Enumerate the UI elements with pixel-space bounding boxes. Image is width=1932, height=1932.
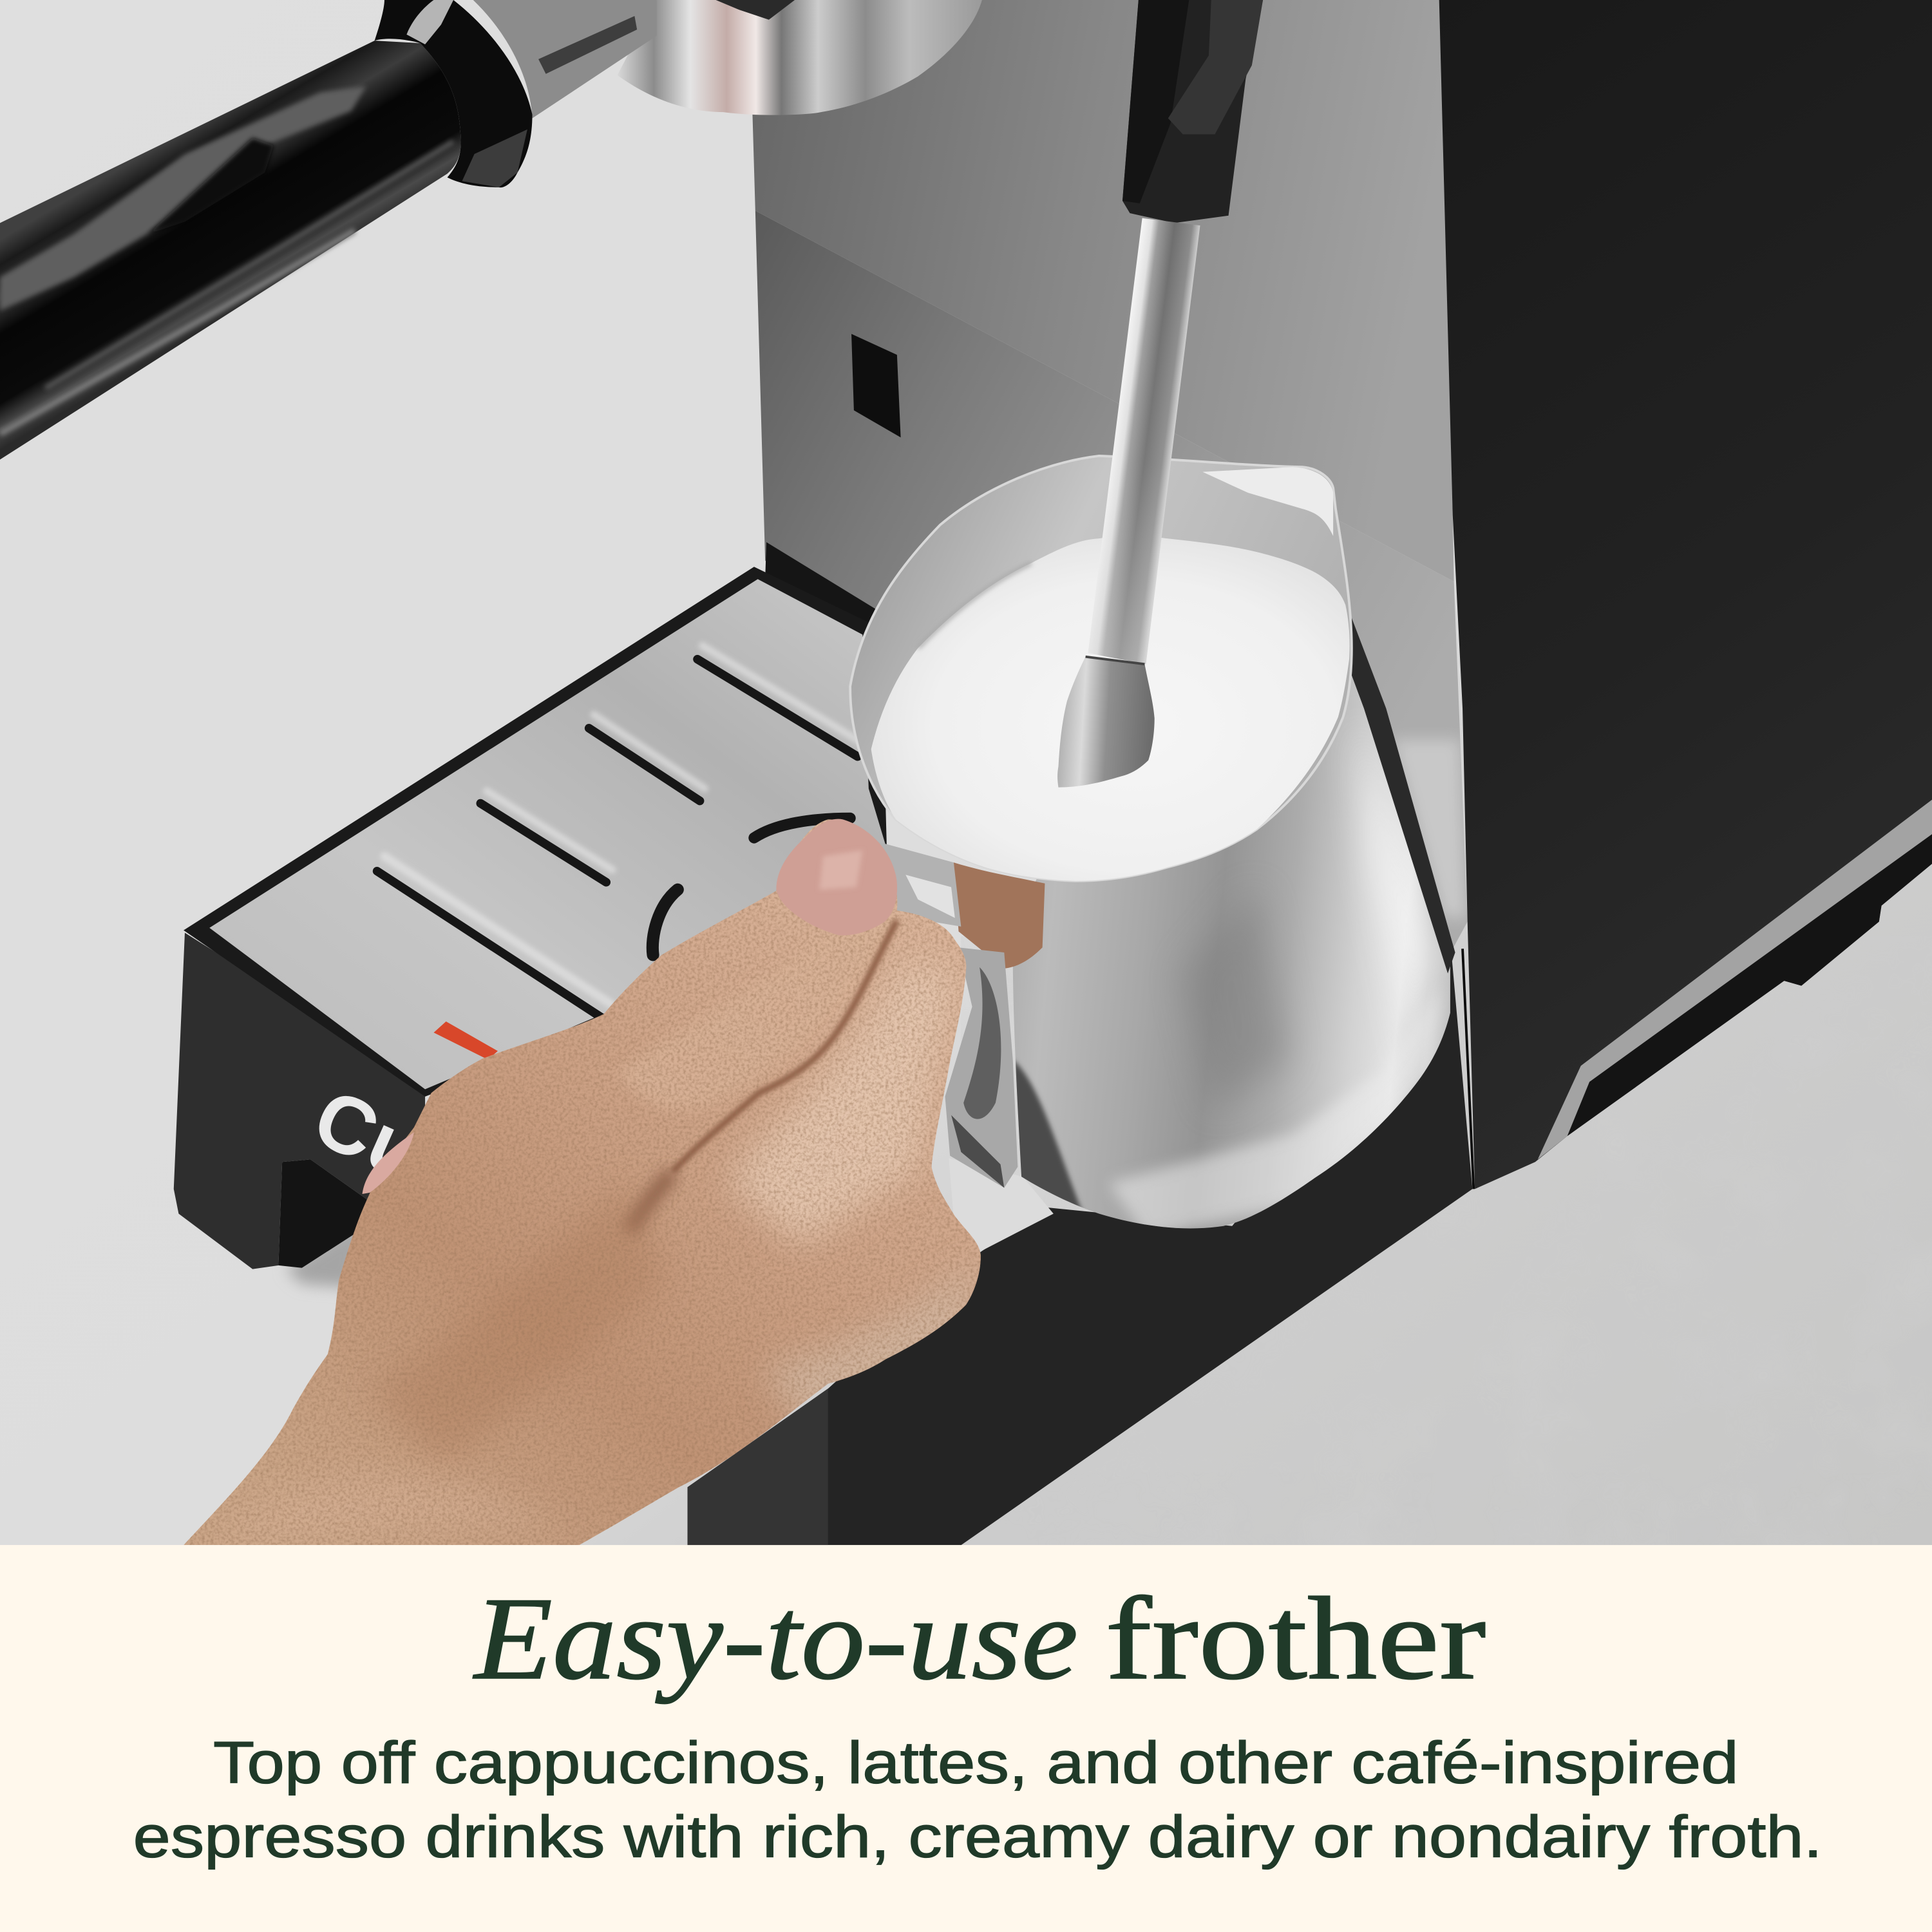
drip tray front [174,933,425,1269]
floor mottling [961,936,1932,1545]
finger nail small [362,1132,414,1194]
machine base [688,954,1472,1545]
handle collar [375,0,533,187]
pitcher rim interior [850,456,1352,881]
base side face [688,1388,828,1545]
knob tab [1168,0,1263,135]
drip tray steel top [209,579,887,1089]
portafilter handle [0,41,461,460]
handle glare dark blob [148,138,274,234]
handle edge highlight [0,231,355,433]
pitcher dark reflection band [1347,605,1455,973]
title: Easy-to-use [472,1573,1078,1704]
collar lower reflection [462,129,527,187]
knob shade [1122,0,1189,204]
handle glare [0,86,366,310]
drip tray rim [184,567,887,1097]
machine dark body [1439,0,1932,1189]
tray logo: Cu [301,1072,437,1198]
body under-trim shadow [1567,834,1932,1136]
panel slot [851,334,901,437]
body trim [1538,800,1932,1159]
body text: espresso drinks with rich, creamy dairy or nondairy froth. [133,1804,1823,1870]
photo: floor background [0,0,1932,1545]
froth bubble edge [918,563,1031,648]
title: frother [1105,1573,1486,1704]
tray steel lower right [949,1158,1054,1252]
floor shadow [283,1235,353,1294]
neck slot [538,16,637,74]
froth surface [871,536,1350,881]
steam wand [1057,218,1200,788]
nail highlight [819,850,862,889]
shadow under panel [765,542,876,622]
body text: Top off cappuccinos, lattes, and other café-inspired [213,1730,1739,1795]
pitcher reflections [1010,715,1442,1238]
base and body seam [1463,949,1473,1189]
steam knob [1122,0,1263,223]
caption panel [0,1545,1932,1932]
handle lower highlight [46,142,453,388]
portafilter basket [618,0,982,115]
machine front panel lower [755,211,1468,951]
finger behind pitcher [954,862,1045,969]
hand [173,813,998,1553]
panel bright glow near base [1392,739,1466,918]
body text [133,1730,1823,1870]
tray slots [377,646,860,1019]
collar chrome [406,0,453,44]
tray notch [278,1159,370,1268]
thumbnail [776,819,897,935]
pitcher body [1013,675,1450,1228]
machine front panel upper [749,0,1454,582]
red indicator [433,1021,498,1059]
portafilter neck [473,0,657,118]
pitcher handle [873,840,1018,1188]
basket dark clip [716,0,795,20]
spout foam [1202,467,1333,536]
